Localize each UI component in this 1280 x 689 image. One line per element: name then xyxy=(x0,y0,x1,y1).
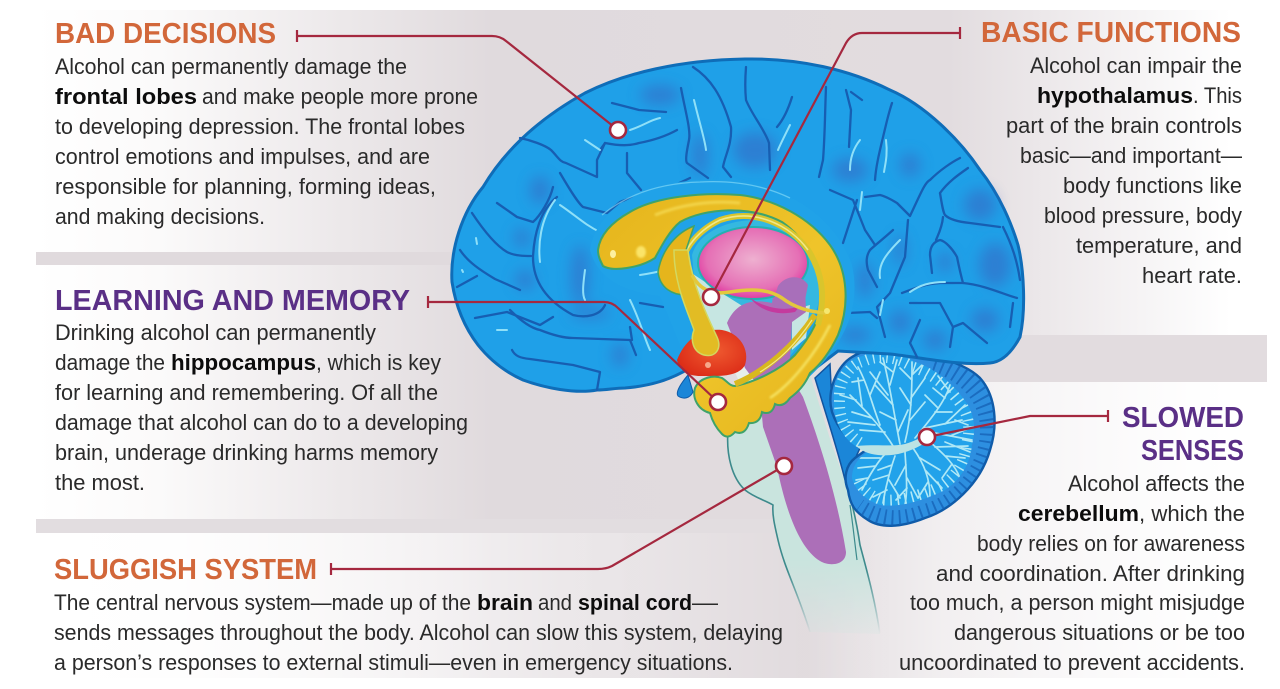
text: bad decisions body xyxy=(55,54,478,229)
lower tract xyxy=(735,315,815,384)
leader line: sluggish system xyxy=(331,458,792,575)
re-drawn purple brain stem top xyxy=(727,275,806,395)
text: slowed senses body xyxy=(899,471,1245,675)
text: learning and memory body: damage that alcohol can do to a developing xyxy=(55,410,468,435)
blue pons strip xyxy=(815,364,860,484)
thin tract xyxy=(692,275,826,313)
text: learning and memory body: Drinking alcohol can permanently xyxy=(55,320,376,345)
lower callosum sulci and highlights xyxy=(630,262,685,350)
text: slowed senses body: too much, a person might misjudge xyxy=(910,590,1245,615)
text: basic functions body: . This xyxy=(1193,83,1242,108)
leader line: learning and memory xyxy=(428,296,726,410)
red amygdala xyxy=(677,330,746,376)
text: slowed senses body: body relies on for awareness xyxy=(977,531,1245,556)
text: slowed senses body: , which the xyxy=(1139,501,1245,526)
leader line: basic functions xyxy=(703,27,960,305)
fornix column xyxy=(674,250,719,356)
panel: bad decisions xyxy=(55,18,478,229)
text: sluggish system body: brain xyxy=(477,590,533,615)
heading: basic functions: BASIC FUNCTIONS xyxy=(981,17,1241,49)
heading: sluggish system: SLUGGISH SYSTEM xyxy=(54,554,317,586)
cerebrum xyxy=(452,59,1024,391)
heading: slowed senses xyxy=(1122,402,1244,467)
leader line: bad decisions xyxy=(297,30,626,138)
text: learning and memory body: , which is key xyxy=(316,350,441,375)
text: sluggish system body: and xyxy=(538,590,572,615)
highlights xyxy=(610,250,616,258)
text: sluggish system body: a person’s responses to external stimuli—even in emergency situations. xyxy=(54,650,733,675)
text: bad decisions body: frontal lobes xyxy=(55,84,197,109)
text: bad decisions body: and making decisions. xyxy=(55,204,265,229)
panel: slowed senses xyxy=(899,402,1245,675)
text: bad decisions body: to developing depression. The frontal lobes xyxy=(55,114,465,139)
text: basic functions body: heart rate. xyxy=(1142,263,1242,288)
small blue structure under frontal lobe xyxy=(677,375,693,398)
cerebrum shading xyxy=(514,85,1011,367)
inner yellow ring xyxy=(681,216,822,325)
text: sluggish system body: — xyxy=(692,590,718,615)
text: slowed senses body: and coordination. After drinking xyxy=(936,561,1245,586)
text: slowed senses body: dangerous situations or be too xyxy=(954,620,1245,645)
text: learning and memory body: brain, underage drinking harms memory xyxy=(55,440,438,465)
yellow limbic structures xyxy=(598,194,846,437)
cerebellum xyxy=(825,345,995,526)
text: basic functions body: body functions like xyxy=(1063,173,1242,198)
text: slowed senses body: Alcohol affects the xyxy=(1068,471,1245,496)
panel: basic functions xyxy=(981,17,1242,288)
heading: slowed senses: SENSES xyxy=(1141,435,1244,467)
text: basic functions body xyxy=(1006,53,1242,288)
brain illustration xyxy=(452,59,1024,634)
cerebrum sulci xyxy=(457,67,1020,390)
purple brain stem xyxy=(727,275,846,564)
text: bad decisions body: Alcohol can permanently damage the xyxy=(55,54,407,79)
text: basic functions body: blood pressure, body xyxy=(1044,203,1242,228)
pale third ventricle xyxy=(690,272,810,352)
heading: slowed senses: SLOWED xyxy=(1122,402,1244,434)
heading: bad decisions: BAD DECISIONS xyxy=(55,18,276,50)
text: sluggish system body: The central nervous system—made up of the xyxy=(54,590,471,615)
text: basic functions body: hypothalamus xyxy=(1037,83,1193,108)
text: basic functions body: basic—and important— xyxy=(1020,143,1242,168)
cerebellum foliage xyxy=(834,354,974,506)
panel: learning and memory xyxy=(55,285,468,495)
text: sluggish system body: spinal cord xyxy=(578,590,692,615)
pink thalamus xyxy=(698,227,808,299)
text: sluggish system body xyxy=(54,590,783,675)
text: basic functions body: Alcohol can impair the xyxy=(1030,53,1242,78)
leader line: slowed senses xyxy=(919,410,1108,445)
text: bad decisions body: and make people more prone xyxy=(202,84,478,109)
cerebrum highlights xyxy=(462,100,945,330)
text: bad decisions body: control emotions and impulses, and are xyxy=(55,144,430,169)
panel: sluggish system xyxy=(54,554,783,675)
fornix lump xyxy=(658,226,694,295)
text: slowed senses body: uncoordinated to prevent accidents. xyxy=(899,650,1245,675)
text: learning and memory body: the most. xyxy=(55,470,145,495)
heading: learning and memory: LEARNING AND MEMORY xyxy=(55,285,410,317)
text: learning and memory body: for learning and remembering. Of all the xyxy=(55,380,438,405)
cavity around thalamus xyxy=(692,220,820,380)
text: learning and memory body xyxy=(55,320,468,495)
text: basic functions body: temperature, and xyxy=(1076,233,1242,258)
text: learning and memory body: damage the xyxy=(55,350,165,375)
text: learning and memory body: hippocampus xyxy=(171,350,316,375)
text: sluggish system body: sends messages throughout the body. Alcohol can slow this system, delaying xyxy=(54,620,783,645)
text: basic functions body: part of the brain controls xyxy=(1006,113,1242,138)
text: bad decisions body: responsible for planning, forming ideas, xyxy=(55,174,436,199)
corpus callosum surround xyxy=(590,180,855,385)
text: slowed senses body: cerebellum xyxy=(1018,501,1139,526)
cerebellum ribs xyxy=(858,362,990,520)
brain stem and spinal cord xyxy=(728,375,880,634)
